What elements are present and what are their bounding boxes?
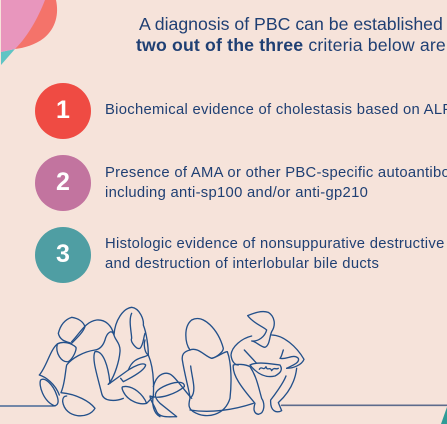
heading bbox=[136, 14, 446, 55]
badge 2: 2 bbox=[56, 168, 70, 196]
heading: A diagnosis of PBC can be established bbox=[139, 14, 443, 34]
badge 3 bbox=[35, 227, 91, 283]
badge 1 bbox=[35, 83, 91, 139]
criterion 2 text: including anti-sp100 and/or anti-gp210 bbox=[105, 184, 368, 200]
heading: two out of the three criteria below are bbox=[136, 35, 446, 55]
criterion 3 text bbox=[105, 236, 447, 272]
decorative corner blob bbox=[1, 0, 58, 65]
people on the left bbox=[0, 307, 160, 417]
people on the right bbox=[150, 312, 447, 417]
badge 3: 3 bbox=[56, 240, 70, 268]
badge 2 bbox=[35, 155, 91, 211]
teal corner accent bbox=[441, 407, 447, 424]
badge 1: 1 bbox=[56, 96, 70, 124]
criterion 3 text: and destruction of interlobular bile ducts bbox=[105, 256, 379, 272]
line illustration: group of people sitting bbox=[0, 306, 447, 418]
criterion 2 text bbox=[105, 165, 447, 200]
